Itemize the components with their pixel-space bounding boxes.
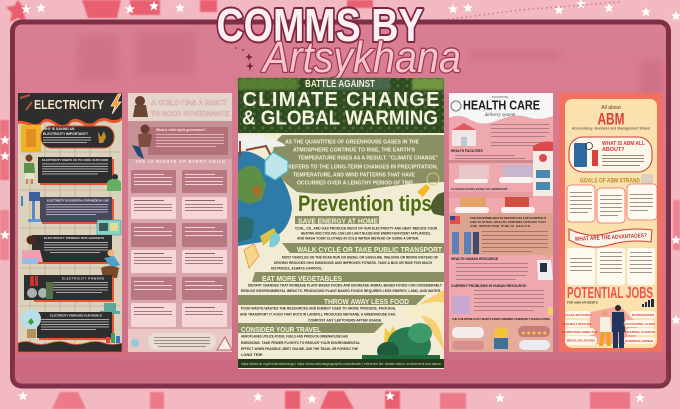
banner: what are the advantages: WHAT ARE THE ADVANTAGES? [575, 233, 647, 243]
heading: health facilities: HEALTH FACILITIES [451, 149, 484, 153]
tip: save energy at home: HEATING AND COOLING, USE LED LIGHT BULBS AND ENERGY-EFFICIENT APPLIANCES, [301, 232, 431, 236]
tip: consider your travel: LONG TRIP. [241, 353, 263, 357]
heading: battle against: BATTLE AGAINST [305, 79, 375, 90]
tip: throw away less food: AND TRANSPORT IT. FOOD THAT ROTS IN LANDFILL PRODUCES METHANE. A GREENHOUSE GAS. [240, 312, 396, 316]
tip: consider your travel: CONSIDER YOUR TRAVEL [241, 325, 321, 334]
tip: walk cycle or take public transport: WALK CYCLE OR TAKE PUBLIC TRANSPORT [297, 245, 442, 254]
panel: electricity infographic [18, 93, 122, 352]
tip: throw away less food: COMPOST ANY LEFTOVERS AFTER USAGE. [308, 318, 382, 322]
section: health human resource: HEALTH HUMAN RESOURCE [451, 257, 499, 261]
tip: eat more vegetables: DIETARY CHANGES THAT INCREASE PLANT-BASED FOODS AND DECREASE ANIMAL-BASED FOODS CAN CONSIDERABLY [248, 284, 443, 288]
icon: hospital [452, 123, 476, 146]
heading: global warming: & GLOBAL WARMING [242, 108, 438, 130]
section: current problems: CURRENT PROBLEMS IN HUMAN RESOURCE: [451, 284, 527, 288]
intro text bubble: TEMPERATURE RISES AS A RESULT. "CLIMATE CHANGE" [298, 156, 438, 162]
section 3 [22, 235, 120, 278]
facility cards [449, 160, 533, 191]
card: what is abm: WHAT IS ABM ALL [602, 141, 646, 147]
tip: throw away less food: THROW AWAY LESS FOOD [324, 297, 410, 306]
title [216, 0, 461, 82]
tip: save energy at home: AND WASH YOUR CLOTHES IN COLD WATER INSTEAD OF USING A DRYER. [297, 236, 419, 240]
section 3: ELECTRICITY POWERS OUR GADGETS [44, 236, 104, 240]
tip: consider your travel: EMISSIONS. TAKE FEWER FLIGHTS TO REDUCE YOUR ENVIRONMENTAL [241, 341, 361, 345]
card: what is abm [569, 137, 652, 172]
ownership cards [449, 192, 535, 213]
job labels: MEDIA RELATIONS [567, 338, 595, 342]
job labels: SALES MANAGER [564, 313, 592, 317]
heading: prevention tips: Prevention tips: [298, 191, 438, 216]
job labels [562, 311, 656, 345]
tip: consider your travel [238, 323, 384, 357]
tan section: health workers: THE PHILIPPINE HEALTH SECTOR HAS 1,224 HOSPITALS [470, 216, 546, 220]
title: comms by: COMMS BY [216, 0, 424, 51]
job labels: BUSINESS OWNER [625, 339, 654, 343]
intro text bubble: ATMOSPHERE CONTINUE TO RISE, THE EARTH'S [293, 148, 415, 154]
tip: throw away less food [238, 295, 426, 322]
intro block [21, 125, 114, 152]
header forest [238, 78, 444, 133]
intro block: WHY IS SAVING AN [43, 127, 75, 131]
tip: walk cycle or take public transport: DRIVING REDUCES GHG EMISSIONS AND IMPROVES FITNESS. TAKE A BUS OR RIDE FOR MUCH [274, 261, 432, 265]
tip: eat more vegetables [241, 272, 444, 293]
tip: walk cycle or take public transport: MOST VEHICLES ON THE ROAD RUN ON DIESEL OR GASOLINE. WALKING OR RIDING INSTEAD OF [282, 256, 439, 260]
closing section [449, 317, 553, 352]
heading: all about abm: All about [601, 105, 621, 111]
what is good governance: What is child rights governance? [156, 128, 206, 132]
tan section: health workers [449, 213, 553, 255]
icon: radio [97, 220, 121, 235]
heading: ten rights: THE 10 RIGHTS OF EVERY CHILD [135, 159, 225, 164]
footer strip [238, 359, 444, 368]
icon: clipboard people [641, 174, 653, 186]
closing section: THE PHILIPPINE GOVT WANTS EVERY MEMBER COMMUNITY IN EDUCATING [452, 317, 550, 321]
section 1: ELECTRICITY KEEPS US TO COOK OUR FOOD [42, 158, 108, 162]
tip: eat more vegetables: EAT MORE VEGETABLES [262, 274, 342, 283]
intro text [491, 124, 549, 146]
what is good governance [128, 121, 232, 159]
icon: light bulb [21, 309, 41, 338]
header: A CHILD HAS A RIGHT [151, 100, 228, 107]
icon: broccoli in cone [362, 290, 444, 363]
illustration: professionals [590, 305, 638, 348]
tip: eat more vegetables: REDUCE ENVIRONMENTAL IMPACTS. PRODUCING PLANT-BASED FOODS REQUIRES LESS ENERGY, LAND, AND WATER. [241, 289, 441, 293]
header: HEALTH CARE [463, 98, 540, 112]
job labels: BOOKKEEPER [632, 313, 655, 317]
section 4 [24, 275, 114, 302]
tan section: health workers: ARE IMPROVING PUBLIC HEALTH [470, 224, 530, 228]
icon: toy blocks [106, 333, 120, 343]
icon: machine [100, 303, 120, 314]
job labels: PROJECT OFFICER [562, 322, 592, 326]
tip: walk cycle or take public transport: DISTANCES, ALWAYS CARPOOL. [271, 266, 323, 270]
heading: all about abm: ABM [598, 110, 624, 128]
heading: all about abm: Accountancy, Business and Management Strand [572, 126, 650, 130]
section 4: ELECTRICITY POWERS [62, 276, 104, 280]
header [128, 93, 232, 121]
heading: potential jobs: FOR ABM STUDENTS [567, 300, 598, 304]
panel: child good governance infographic [128, 93, 232, 352]
facility cards: CLASSIFICATIONS BASED ON OWNERSHIP [451, 187, 508, 191]
sparkles [235, 47, 254, 71]
tip: save energy at home: SAVE ENERGY AT HOME [298, 216, 378, 226]
footer [18, 342, 122, 352]
rights cards grid [131, 170, 227, 327]
job labels: MARKETING DIRECTOR [562, 330, 599, 334]
tip: throw away less food: FOOD WASTE WASTES THE RESOURCES AND ENERGY USED TO GROW, PRODUCE, PACKAGE, [241, 306, 396, 310]
panel: climate change infographic [238, 78, 444, 369]
panel: ABM strand infographic [559, 93, 663, 352]
footer bubble [128, 329, 232, 352]
header: ELECTRICITY [34, 97, 104, 112]
tip: consider your travel: AEROPLANES UTILIZE FOSSIL FUELS AND PRODUCE GREENHOUSE GAS [241, 334, 349, 338]
card: what is abm: ABOUT? [602, 147, 624, 153]
intro block: ELECTRICITY IMPORTANT? [43, 132, 88, 136]
section: current problems [451, 284, 553, 315]
heading: potential jobs [567, 285, 653, 304]
icon: tower building [533, 142, 553, 196]
intro text bubble [272, 135, 444, 194]
section 2: ELECTRICITY IS ESSENTIAL FOR MEDICAL USE [47, 198, 109, 202]
intro text bubble: REFERS TO THE LONG-TERM CHANGES IN PRECIPITATION, [288, 164, 438, 170]
panel: health care infographic [449, 93, 553, 352]
intro text bubble: TEMPERATURE, AND WIND PATTERNS THAT HAVE [293, 172, 415, 178]
tip: save energy at home [295, 216, 437, 240]
header: TO GOOD GOVERNANCE [151, 111, 229, 118]
heading: climate change: CLIMATE CHANGE [242, 89, 440, 111]
title: artsykhana: Artsykhana [260, 33, 461, 82]
footer strip: https://www.un.org/en/climatechange | https://www.nationalgeographic.com/climate/ | reference list: climate action, environment and nature [241, 362, 441, 366]
tip: consider your travel: EFFECT. WHEN FEASIBLE, MEET ONLINE, USE THE TRAIN, OR FOREGO THE [241, 347, 359, 351]
intro text bubble: AS THE QUANTITIES OF GREENHOUSE GASES IN THE [285, 140, 419, 146]
goal cards [567, 184, 657, 223]
header: delivery system [485, 113, 516, 118]
tip: walk cycle or take public transport [271, 243, 444, 270]
chart icon [642, 299, 654, 307]
section 1 [24, 154, 121, 191]
icon: globe [238, 135, 292, 268]
decorative branch [431, 192, 444, 216]
header [449, 93, 553, 124]
job labels: INTERNAL AUDITOR [625, 330, 656, 334]
tip: save energy at home: COAL, OIL, AND GAS PRODUCE MUCH OF OUR ELECTRICITY AND HEAT. REDUCE YOUR [295, 226, 437, 230]
heading: all about abm [572, 105, 650, 130]
advantage cards [567, 248, 655, 285]
banner: what are the advantages [569, 229, 652, 247]
header: PHILIPPINE [492, 95, 508, 99]
header [18, 93, 122, 128]
job labels: ACCOUNTING CLERK [623, 322, 656, 326]
icon: lightning bolt [111, 94, 121, 114]
section 5: ELECTRICITY ENRICHES OUR WORLD [50, 314, 102, 318]
icon: light bulb [417, 173, 439, 197]
tan section: health workers: AND 20 RURAL HEALTH CENTERS OFFICES THAT [470, 220, 546, 224]
closing section: ★★★★★ [521, 330, 547, 337]
intro text bubble: OCCURRED OVER A LENGTHY PERIOD OF TIME. [297, 180, 415, 186]
section 5 [37, 312, 114, 340]
section: health human resource [451, 252, 553, 280]
heading: goals: GOALS OF ABM STRAND [580, 178, 640, 184]
section 2 [22, 192, 114, 224]
